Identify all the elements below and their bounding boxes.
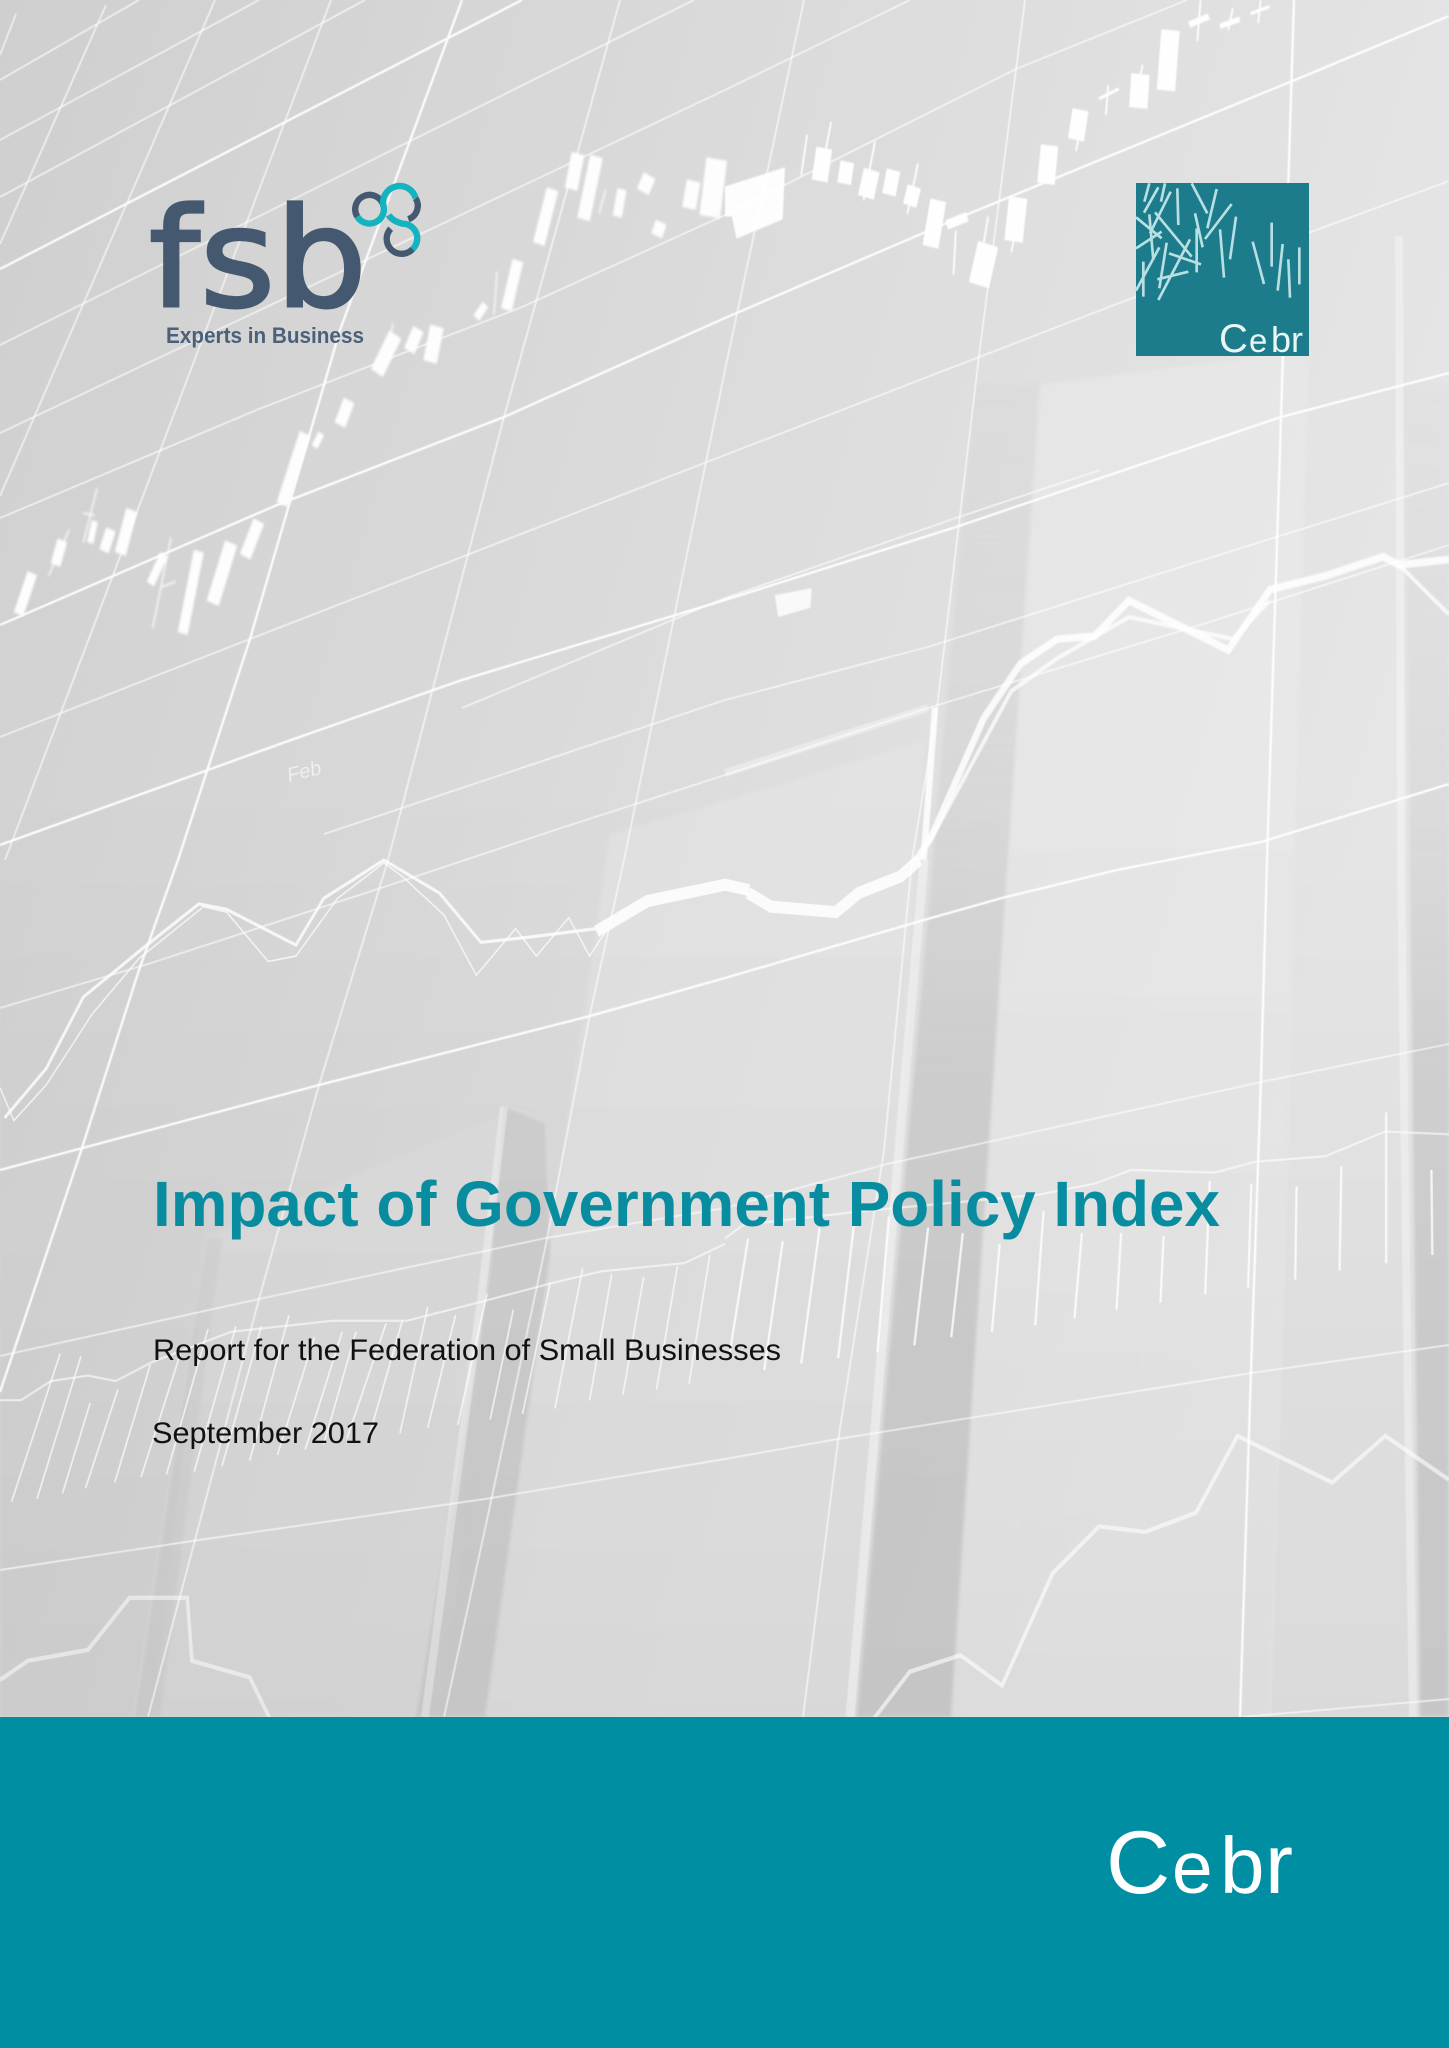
main line chart and bars: lower-left area xyxy=(0,860,749,1720)
logo: Cebr square xyxy=(1136,183,1309,361)
main line chart: right section xyxy=(917,557,1449,860)
Cebr large wordmark: C xyxy=(1106,1812,1170,1912)
candlestick chart: left section xyxy=(18,154,717,634)
fsb wordmark: fsb xyxy=(149,180,367,339)
Cebr small wordmark: b xyxy=(1271,319,1291,360)
title: Impact of Government Policy Index xyxy=(153,1168,1220,1240)
Cebr large wordmark: b xyxy=(1220,1821,1264,1910)
logo: fsb xyxy=(149,180,418,348)
month label in photo: Feb xyxy=(285,757,324,787)
main line chart and bars: lower-right area xyxy=(725,860,1449,1720)
Cebr small wordmark: C xyxy=(1219,317,1248,361)
Cebr small wordmark: r xyxy=(1291,319,1303,360)
date: September 2017 xyxy=(152,1417,379,1450)
icon: scattered sticks xyxy=(1136,183,1299,300)
Cebr small wordmark: e xyxy=(1249,322,1267,359)
Cebr large wordmark: e xyxy=(1172,1828,1213,1909)
subtitle: Report for the Federation of Small Businesses xyxy=(153,1334,781,1367)
icon: fsb infinity knot xyxy=(355,186,418,254)
footer band xyxy=(0,1717,1449,2048)
candlestick chart: right section xyxy=(725,0,1270,617)
Cebr large wordmark: r xyxy=(1265,1817,1293,1911)
fsb tagline: Experts in Business xyxy=(166,323,364,348)
